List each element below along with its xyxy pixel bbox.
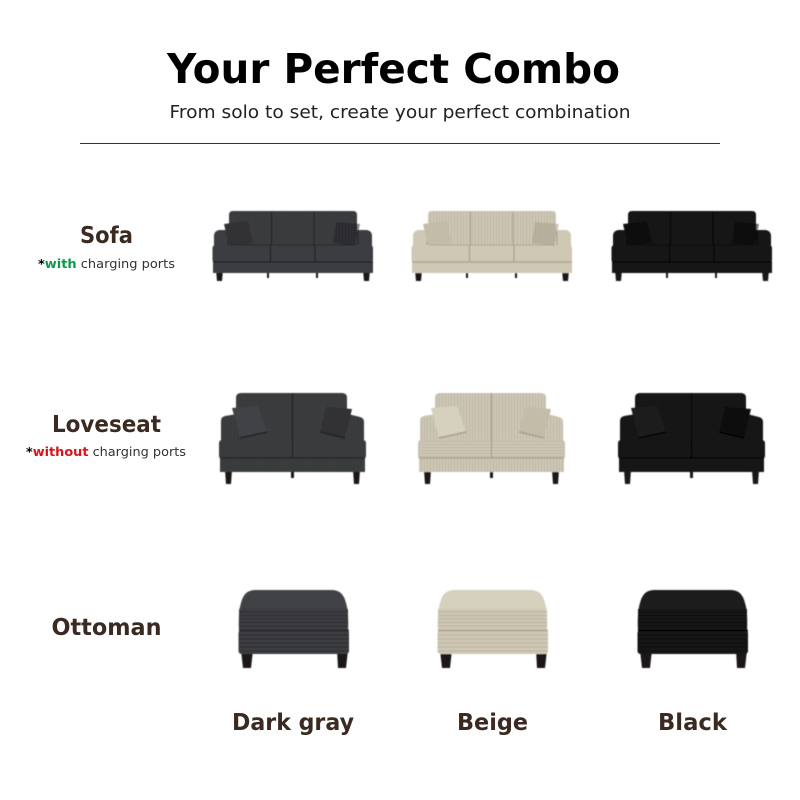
loveseat: beige: [418, 393, 565, 484]
loveseat: dark gray: [219, 393, 366, 484]
sofa: dark gray: [212, 211, 373, 281]
row label: Loveseat: [26, 412, 186, 459]
title: Your Perfect Combo: [166, 45, 620, 93]
sofa: black: [612, 211, 772, 281]
ottoman: dark gray: [238, 590, 349, 668]
row label: Loveseat: *without charging ports: [26, 444, 186, 459]
row label: Ottoman: Ottoman: [52, 615, 162, 641]
row label: Sofa: *with charging ports: [38, 256, 175, 271]
row label: Loveseat: Loveseat: [52, 412, 161, 438]
ottoman: beige: [438, 590, 548, 668]
colour label: Black: Black: [658, 710, 728, 736]
subtitle: From solo to set, create your perfect combination: [170, 102, 630, 123]
loveseat: black: [618, 393, 765, 484]
sofa: beige: [412, 211, 572, 281]
ottoman: black: [638, 590, 748, 668]
row label: Sofa: [38, 223, 175, 271]
colour label: Beige: Beige: [457, 710, 528, 736]
colour label: Dark gray: Dark gray: [232, 710, 354, 736]
row label: Sofa: Sofa: [80, 223, 133, 249]
